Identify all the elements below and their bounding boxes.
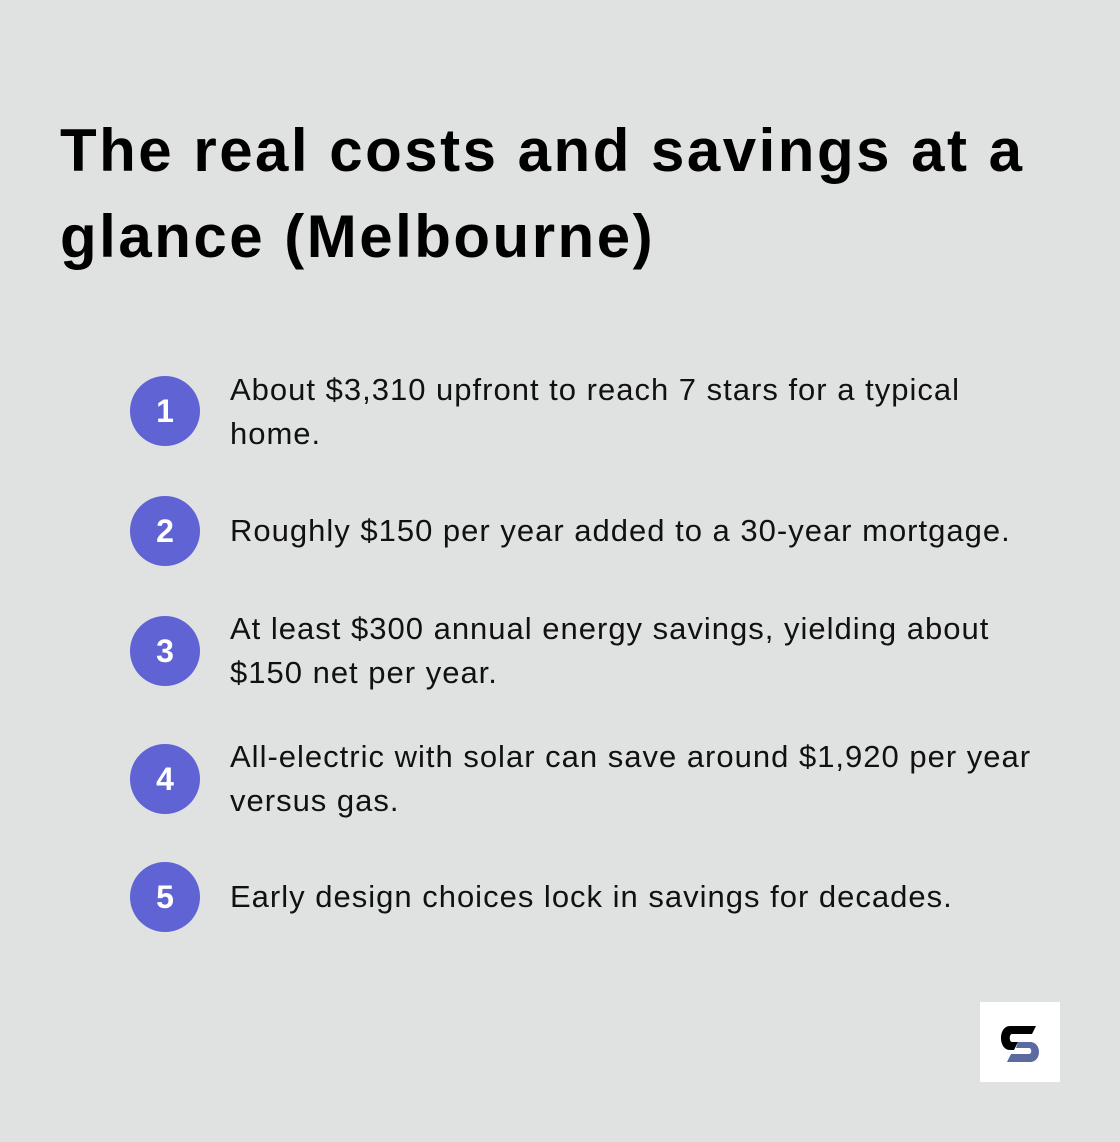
item 4: All-electric with solar can save around $1,920 per year xyxy=(230,739,1031,774)
item 3: At least $300 annual energy savings, yielding about xyxy=(230,611,989,646)
item 2: Roughly $150 per year added to a 30-year mortgage. xyxy=(230,513,1011,548)
item 5 xyxy=(130,862,953,932)
item 3 xyxy=(130,611,989,690)
item 2: 2 xyxy=(156,513,174,549)
title xyxy=(60,117,1025,270)
title: The real costs and savings at a xyxy=(60,117,1025,184)
logo xyxy=(980,1002,1060,1082)
item 2 xyxy=(130,496,1011,566)
item 1: About $3,310 upfront to reach 7 stars for a typical xyxy=(230,372,960,407)
title: glance (Melbourne) xyxy=(60,203,655,270)
item 3: $150 net per year. xyxy=(230,655,498,690)
item 5: Early design choices lock in savings for decades. xyxy=(230,879,953,914)
item 4: 4 xyxy=(156,761,174,797)
item 1: home. xyxy=(230,416,321,451)
item 1 xyxy=(130,372,960,451)
item 1: 1 xyxy=(156,393,174,429)
item 4 xyxy=(130,739,1031,818)
item 4: versus gas. xyxy=(230,783,400,818)
item 5: 5 xyxy=(156,879,174,915)
item 3: 3 xyxy=(156,633,174,669)
